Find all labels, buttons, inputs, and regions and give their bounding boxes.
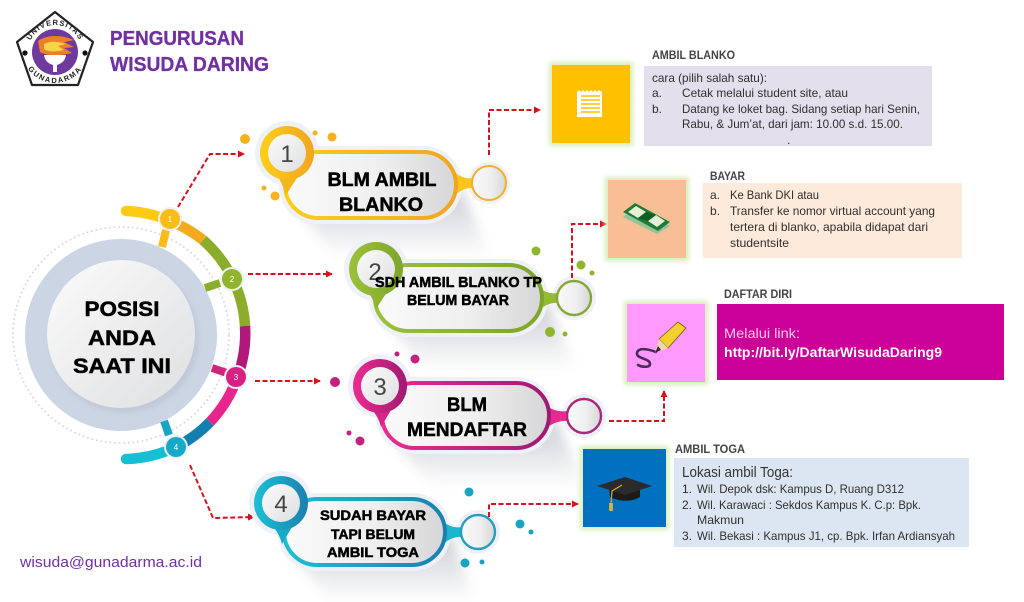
panel: daftar diri xyxy=(717,304,1004,380)
panel: ambil blanko: a. xyxy=(652,86,662,100)
panel: ambil toga: 3. xyxy=(682,529,692,543)
icon tile: graduation cap xyxy=(580,446,669,530)
contact email: wisuda@gunadarma.ac.id xyxy=(19,554,202,571)
arrow: node 2 to step 2 xyxy=(248,273,332,275)
panel: ambil blanko: Datang ke loket bag. Sidang setiap hari Senin, xyxy=(682,102,920,116)
step 4 pill: sudah bayar tapi belum ambil toga xyxy=(249,471,534,602)
label: ambil blanko: AMBIL BLANKO xyxy=(652,50,735,62)
step 2 pill: sdh ambil blanko tp belum bayar: BELUM BAYAR xyxy=(407,293,510,309)
panel: ambil blanko: Rabu, & Jum’at, dari jam: 10.00 s.d. 15.00. xyxy=(682,117,903,131)
central disc xyxy=(49,263,199,413)
spokes xyxy=(162,230,227,435)
panel: ambil blanko: . xyxy=(787,133,790,147)
node 4: 4 xyxy=(174,443,179,452)
panel: ambil toga: Wil. Depok dsk: Kampus D, Ruang D312 xyxy=(697,482,904,496)
step 2 pill: sdh ambil blanko tp belum bayar: SDH AMBIL BLANKO TP xyxy=(375,275,542,291)
panel: bayar: a. xyxy=(710,188,720,202)
node 2: 2 xyxy=(230,275,235,284)
panel: ambil toga: Wil. Karawaci : Sekdos Kampus K. C.p: Bpk. xyxy=(697,498,921,512)
label: bayar: BAYAR xyxy=(710,171,746,183)
panel: ambil blanko xyxy=(644,66,932,147)
panel: ambil toga: 1. xyxy=(682,482,692,496)
icon tile: money xyxy=(605,177,689,261)
panel: bayar: b. xyxy=(710,204,720,218)
arrow: node 3 to step 3 xyxy=(255,380,320,382)
step 1 pill: blm ambil blanko: BLANKO xyxy=(339,195,423,216)
panel: bayar: studentsite xyxy=(730,236,789,250)
arrow: step 3 to daftar diri xyxy=(609,391,664,421)
arrow: step 2 to bayar xyxy=(572,224,606,278)
panel: ambil toga: Makmun xyxy=(697,513,744,527)
label: daftar diri: DAFTAR DIRI xyxy=(724,289,792,301)
central label: POSISI xyxy=(84,298,160,321)
label: ambil toga: AMBIL TOGA xyxy=(675,444,745,456)
node 4 xyxy=(164,435,188,459)
node 2 xyxy=(220,267,244,291)
step 2 pill: sdh ambil blanko tp belum bayar: 2 xyxy=(368,259,382,286)
panel: bayar: tertera di blanko, apabila didapat dari xyxy=(730,220,928,234)
central label xyxy=(73,298,171,378)
logo: Universitas Gunadarma: UNIVERSITAS xyxy=(26,20,83,40)
panel: bayar xyxy=(703,183,962,258)
central label: SAAT INI xyxy=(73,355,171,378)
dotted ring xyxy=(13,227,229,443)
step 3 pill: blm mendaftar: 3 xyxy=(373,374,387,401)
panel: bayar: Ke Bank DKI atau xyxy=(730,188,819,202)
arc segments xyxy=(126,211,245,459)
step 4 pill: sudah bayar tapi belum ambil toga: TAPI BELUM xyxy=(331,527,415,542)
panel: ambil toga: 2. xyxy=(682,498,692,512)
panel: ambil blanko: Cetak melalui student site, atau xyxy=(682,86,848,100)
outer blue disc xyxy=(25,239,217,431)
step 3 pill: blm mendaftar xyxy=(330,352,606,488)
title xyxy=(110,28,269,76)
node 3 xyxy=(224,365,248,389)
step 1 pill: blm ambil blanko: BLM AMBIL xyxy=(328,170,437,191)
central label: ANDA xyxy=(88,327,156,350)
step 1 pill: blm ambil blanko xyxy=(240,121,510,258)
step 1 pill: blm ambil blanko: 1 xyxy=(280,141,294,168)
title: PENGURUSAN xyxy=(110,28,244,50)
arrow: node 1 to step 1 xyxy=(178,154,244,207)
arrow: node 4 to step 4 xyxy=(190,465,254,518)
step 4 pill: sudah bayar tapi belum ambil toga: 4 xyxy=(274,491,288,518)
arrow: step 1 to ambil blanko xyxy=(489,110,540,155)
step 3 pill: blm mendaftar: BLM xyxy=(447,395,487,416)
panel: ambil toga: Lokasi ambil Toga: xyxy=(682,465,793,481)
step 3 pill: blm mendaftar: MENDAFTAR xyxy=(407,420,527,441)
circular diagram: posisi anda saat ini xyxy=(13,207,248,459)
panel: ambil blanko: b. xyxy=(652,102,662,116)
node 1 xyxy=(158,207,182,231)
panel: daftar diri: http://bit.ly/DaftarWisudaDaring9 xyxy=(724,344,942,360)
icon tile: pencil xyxy=(624,301,708,385)
arrow: step 4 to ambil toga xyxy=(489,504,578,517)
icon tile: notepad xyxy=(549,62,633,146)
node 1: 1 xyxy=(168,215,173,224)
panel: daftar diri: Melalui link: xyxy=(724,325,800,341)
panel: ambil toga: Wil. Bekasi : Kampus J1, cp. Bpk. Irfan Ardiansyah xyxy=(697,529,955,543)
panel: ambil blanko: cara (pilih salah satu): xyxy=(652,71,767,85)
panel: ambil toga xyxy=(674,458,969,547)
panel: bayar: Transfer ke nomor virtual account yang xyxy=(730,204,935,218)
step 2 pill: sdh ambil blanko tp belum bayar xyxy=(344,237,596,371)
node 3: 3 xyxy=(234,373,239,382)
step 4 pill: sudah bayar tapi belum ambil toga: AMBIL TOGA xyxy=(327,545,419,560)
step 4 pill: sudah bayar tapi belum ambil toga: SUDAH BAYAR xyxy=(320,508,426,523)
logo: Universitas Gunadarma xyxy=(16,10,94,86)
logo: Universitas Gunadarma: GUNADARMA xyxy=(28,66,82,83)
title: WISUDA DARING xyxy=(110,54,269,76)
